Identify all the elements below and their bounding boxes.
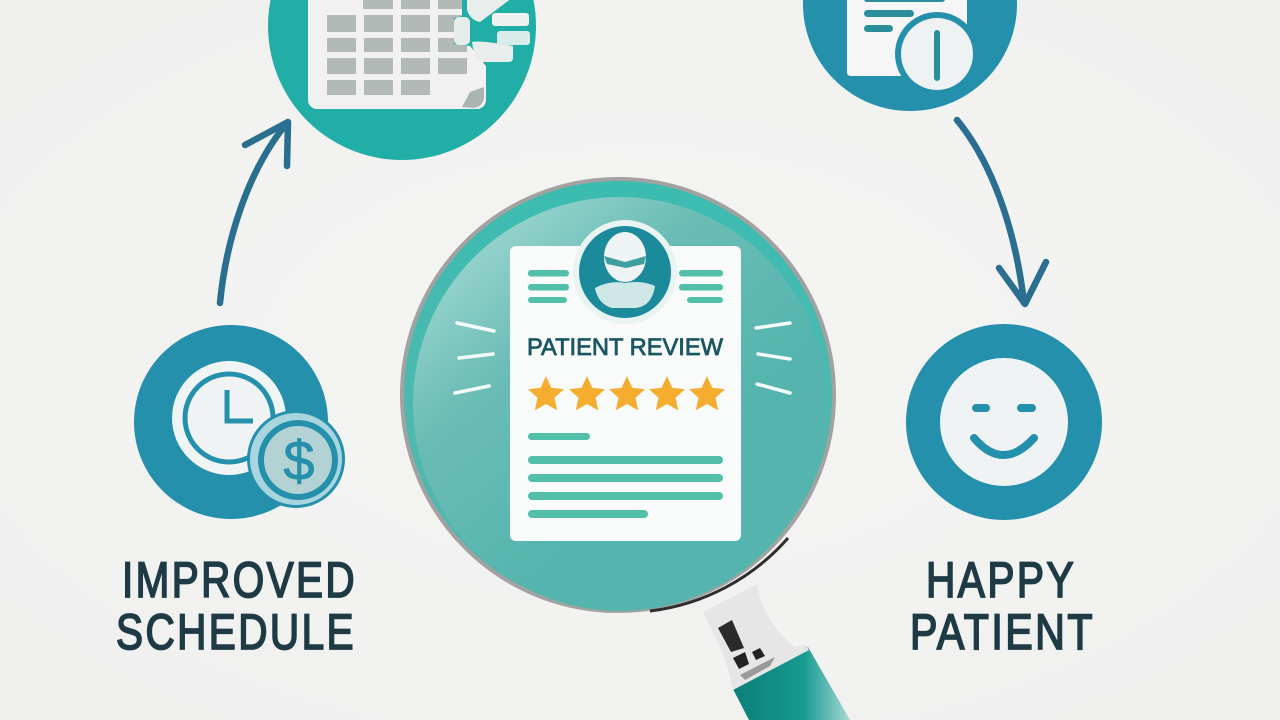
avatar	[573, 220, 677, 324]
heading: patient review: PATIENT REVIEW	[527, 334, 723, 361]
review text lines	[528, 433, 723, 518]
label: happy patient: HAPPY	[926, 552, 1076, 608]
label: improved schedule: SCHEDULE	[116, 604, 356, 660]
label: happy patient	[910, 552, 1095, 660]
star rating	[528, 376, 725, 410]
glow ticks: right	[756, 323, 790, 393]
icon: calendar circle	[268, 0, 536, 160]
icon: document info circle	[803, 0, 1017, 111]
rim shadow	[650, 538, 788, 611]
glow ticks: left	[455, 323, 494, 393]
label: improved schedule: IMPROVED	[122, 552, 357, 608]
icon: happy face circle	[906, 324, 1102, 520]
label: happy patient: PATIENT	[910, 604, 1095, 660]
arrow: down to happy patient	[957, 120, 1046, 304]
icon: clock and coin circle	[134, 325, 345, 519]
review card	[510, 220, 741, 541]
icon: clock and coin circle: $	[283, 429, 315, 492]
review lines: left	[528, 270, 569, 303]
magnifying glass lens	[402, 179, 834, 611]
label: improved schedule	[116, 552, 357, 660]
magnifying glass handle	[703, 584, 850, 720]
review lines: right	[679, 270, 723, 303]
arrow: up to calendar	[220, 122, 288, 303]
